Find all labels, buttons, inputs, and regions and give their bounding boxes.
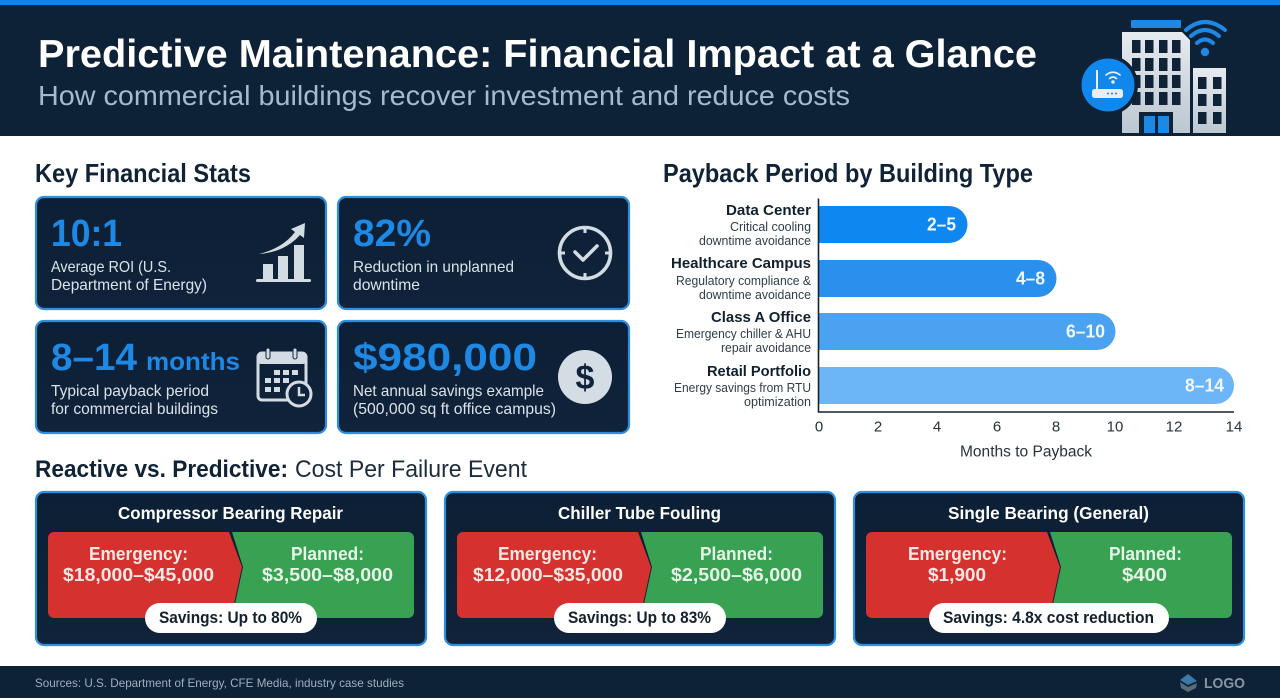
bar: data center: Data Center [726, 202, 811, 219]
savings pill [145, 603, 317, 633]
stat card: 10:1 ROI: 10:1 [51, 213, 122, 255]
stat card: $980,000 savings: $980,000 [353, 337, 537, 379]
heading: key financial stats: Key Financial Stats [35, 158, 251, 188]
subtitle: How commercial buildings recover investment and reduce costs [38, 80, 850, 111]
bar: class a office: repair avoidance [721, 341, 811, 355]
sources: Sources: U.S. Department of Energy, CFE Media, industry case studies [35, 676, 404, 690]
icon: clock with check [559, 227, 611, 279]
chart axes: 12 [1166, 418, 1182, 436]
bar: data center: Critical cooling [730, 220, 811, 234]
chart axes: Months to Payback [960, 444, 1092, 460]
stat card: 82% downtime: Reduction in unplanned [353, 259, 514, 276]
chart axes: 2 [874, 418, 882, 436]
bar: healthcare campus: Regulatory compliance & [676, 274, 812, 288]
stat card: $980,000 savings: (500,000 sq ft office campus) [353, 401, 556, 418]
icon: calendar with clock [258, 348, 311, 406]
title: Predictive Maintenance: Financial Impact at a Glance [38, 33, 1037, 76]
logo: LOGO [1204, 675, 1245, 692]
chart axes [815, 198, 1242, 460]
bar: retail portfolio: optimization [744, 395, 811, 409]
chart axes: 8 [1052, 418, 1060, 436]
panel: compressor bearing repair: Compressor Bearing Repair [118, 503, 343, 523]
heading: reactive vs predictive [35, 456, 527, 483]
savings pill [929, 603, 1169, 633]
stat card: 82% downtime: downtime [353, 277, 420, 294]
chart axes: 14 [1226, 418, 1242, 436]
bar: healthcare campus: 4–8 [1016, 268, 1045, 288]
bar: class a office: Class A Office [711, 309, 811, 326]
bar: retail portfolio: Energy savings from RTU [674, 381, 811, 395]
heading: reactive vs predictive: Reactive vs. Predictive: [35, 456, 288, 483]
panel: chiller tube fouling: $2,500–$6,000 [671, 565, 802, 585]
stat card: $980,000 savings: Net annual savings example [353, 383, 544, 400]
savings pill: Savings: Up to 83% [568, 609, 711, 627]
savings pill: Savings: Up to 80% [159, 609, 302, 627]
stat card: 8–14 months payback [36, 321, 326, 433]
panel: chiller tube fouling: Emergency: [498, 544, 597, 564]
bar: healthcare campus [671, 255, 1056, 302]
bar chart: payback period by building type [671, 198, 1242, 460]
chart axes: 10 [1107, 418, 1123, 436]
stat card: 10:1 ROI: Department of Energy) [51, 277, 207, 294]
heading: reactive vs predictive: Cost Per Failure Event [295, 456, 527, 483]
panel: compressor bearing repair: $3,500–$8,000 [262, 565, 393, 585]
stat card: 8–14 months payback: months [146, 348, 240, 376]
chart axes: 4 [933, 418, 941, 436]
panel: key financial stats cards [36, 197, 629, 433]
panel: chiller tube fouling: Chiller Tube Fouling [558, 503, 721, 523]
stat card: 8–14 months payback: 8–14 [51, 337, 137, 379]
icon: dollar coin: $ [576, 359, 595, 397]
panel: chiller tube fouling [445, 492, 835, 645]
bar: healthcare campus: downtime avoidance [699, 288, 811, 302]
stat card: 8–14 months payback: Typical payback period [51, 383, 209, 400]
panel: single bearing: Single Bearing (General) [948, 503, 1149, 523]
header band [0, 0, 1280, 136]
chart axes: 0 [815, 418, 823, 436]
logo [1180, 674, 1245, 692]
bar: data center [699, 202, 968, 248]
bar: data center: 2–5 [927, 214, 956, 234]
bar: retail portfolio: 8–14 [1185, 376, 1224, 396]
stat card: 10:1 ROI [36, 197, 326, 309]
bar: retail portfolio: Retail Portfolio [707, 363, 811, 380]
bar: class a office: 6–10 [1066, 322, 1105, 342]
stat card: 82% downtime: 82% [353, 213, 431, 255]
stat card: 82% downtime [338, 197, 629, 309]
panel: single bearing: Planned: [1109, 544, 1182, 564]
chart axes: 6 [993, 418, 1001, 436]
footer band [0, 666, 1280, 698]
bar: class a office: Emergency chiller & AHU [676, 327, 811, 341]
bar: retail portfolio [674, 363, 1234, 409]
panel: compressor bearing repair [36, 492, 426, 645]
icon: rising bar chart [256, 223, 311, 282]
bar: healthcare campus: Healthcare Campus [671, 255, 811, 272]
icon: smart building with wifi [1078, 20, 1226, 133]
savings pill: Savings: 4.8x cost reduction [943, 609, 1154, 627]
heading: payback period: Payback Period by Building Type [663, 158, 1033, 188]
panel: compressor bearing repair: Emergency: [89, 544, 188, 564]
panel: single bearing [854, 492, 1244, 645]
bar: data center: downtime avoidance [699, 234, 811, 248]
panel: compressor bearing repair: $18,000–$45,000 [63, 565, 214, 585]
bar: class a office [676, 309, 1116, 355]
panel: single bearing: $1,900 [928, 565, 986, 585]
stat card: 10:1 ROI: Average ROI (U.S. [51, 259, 171, 276]
icon: dollar coin [558, 350, 612, 404]
savings pill [554, 603, 726, 633]
panel: single bearing: Emergency: [908, 544, 1007, 564]
panel: compressor bearing repair: Planned: [291, 544, 364, 564]
stat card: 8–14 months payback: for commercial buildings [51, 401, 218, 418]
panel: chiller tube fouling: $12,000–$35,000 [473, 565, 623, 585]
panel: single bearing: $400 [1122, 565, 1167, 585]
stat card: $980,000 savings [338, 321, 629, 433]
panel: chiller tube fouling: Planned: [700, 544, 773, 564]
